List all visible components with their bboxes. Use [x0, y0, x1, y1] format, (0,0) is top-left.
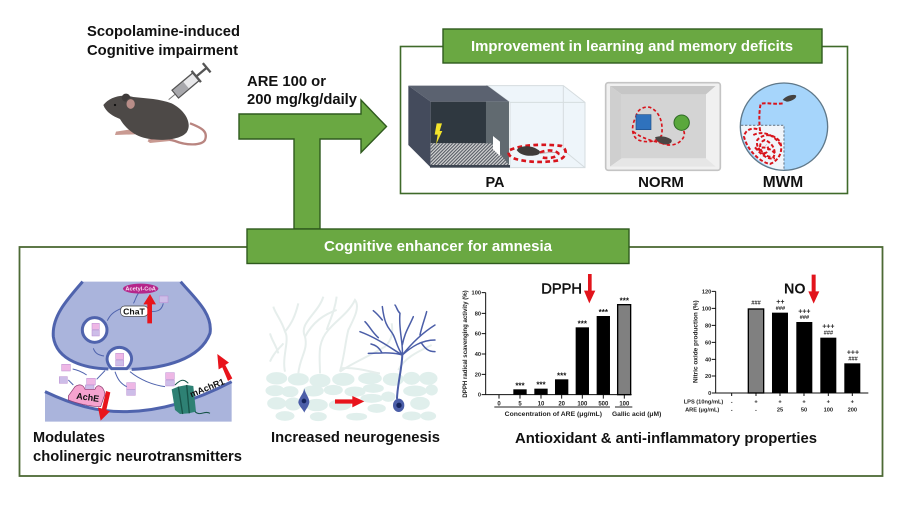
- y ticks: 60: [705, 340, 711, 346]
- y ticks: 100: [702, 306, 711, 312]
- significance: ***: [557, 371, 567, 380]
- significance: ***: [578, 319, 588, 328]
- y ticks: 100: [472, 291, 481, 297]
- label: Acetyl-CoA: [123, 284, 158, 294]
- panel: PA test chamber: [408, 86, 585, 168]
- significance: ###: [776, 306, 786, 312]
- receptor: mAchR1: [172, 376, 226, 414]
- x table: -: [731, 399, 733, 405]
- text: dose: ARE 100 or: [247, 74, 326, 90]
- text: scopolamine label: Cognitive impairment: [87, 43, 238, 59]
- diagram: neurogenesis: [267, 297, 437, 420]
- x table: 50: [801, 407, 807, 413]
- y title: DPPH radical scavenging activity (%): [463, 290, 469, 398]
- chart: NO bar chart: [684, 275, 868, 413]
- arrow: T-shaped green treatment arrow: [239, 100, 386, 229]
- icon: lightning: [435, 123, 442, 145]
- heading: improvement: Improvement in learning and memory deficits: [471, 39, 793, 55]
- x table: 25: [777, 407, 783, 413]
- text: scopolamine label: Scopolamine-induced: [87, 24, 240, 40]
- significance: ***: [515, 381, 526, 390]
- icon: mature neuron: [360, 305, 435, 398]
- receptor: mAchR1: mAchR1: [188, 376, 226, 399]
- text: dose: 200 mg/kg/daily: [247, 92, 358, 108]
- y ticks: [472, 291, 481, 399]
- y ticks: 0: [708, 391, 711, 397]
- y ticks: 20: [475, 372, 481, 378]
- x table: +: [851, 399, 855, 405]
- significance: ###: [800, 315, 810, 321]
- panel: NORM test arena: [606, 83, 720, 170]
- text: MWM label: MWM: [763, 174, 803, 191]
- arrow: receptor up: [217, 354, 232, 381]
- text: cholinergic caption: cholinergic neurotransmitters: [33, 449, 242, 465]
- y title: Nitric oxide production (%): [693, 300, 699, 383]
- panel: cognitive outcomes: [400, 46, 848, 194]
- axes: [712, 291, 868, 396]
- label: Acetyl-CoA: Acetyl-CoA: [125, 287, 156, 293]
- significance: [515, 297, 630, 390]
- chart: DPPH bar chart: [463, 274, 661, 418]
- x table: +: [802, 399, 806, 405]
- chart: NO bar chart: +++: [798, 308, 810, 315]
- exploration path: [633, 107, 684, 145]
- arrow: DPPH down: [584, 274, 595, 303]
- chart: NO bar chart: +++: [847, 350, 859, 357]
- text: antioxidant caption: Antioxidant & anti-inflammatory properties: [515, 431, 817, 447]
- row labels: [684, 399, 723, 413]
- arrow: differentiation: [335, 396, 364, 407]
- chart: NO bar chart: +++: [822, 324, 834, 331]
- text: NORM label: NORM: [638, 174, 684, 191]
- axes: [482, 293, 632, 399]
- background cells: [267, 373, 437, 420]
- row labels: LPS (10ng/mL): [684, 399, 723, 405]
- chart: DPPH bar chart: Gallic acid (μM): [612, 411, 661, 418]
- panel: cognitive enhancer mechanisms: [20, 247, 882, 476]
- icon: syringe: [164, 62, 211, 105]
- heading: cognitive enhancer: Cognitive enhancer for amnesia: [324, 239, 553, 255]
- y ticks: 120: [702, 289, 711, 295]
- significance: ***: [620, 297, 630, 306]
- mouse: [783, 95, 796, 102]
- arrow: ChaT up: [143, 294, 156, 323]
- significance: ***: [536, 381, 547, 390]
- y ticks: [702, 289, 711, 397]
- x table: [731, 399, 857, 413]
- x table: -: [731, 407, 733, 413]
- object: blue cube: [636, 115, 651, 130]
- title: NO: [784, 281, 805, 297]
- arrow: AchE down: [98, 391, 110, 421]
- mouse: [655, 136, 672, 144]
- x table: +: [778, 399, 782, 405]
- object: green ball: [674, 115, 689, 130]
- title: DPPH: [541, 281, 582, 297]
- x table: 200: [848, 407, 857, 413]
- x table: +: [754, 399, 758, 405]
- enzyme: AchE: AchE: [76, 391, 100, 404]
- x ticks: 100: [619, 401, 630, 407]
- icon: vesicle transmitters: [59, 296, 174, 395]
- mouse path: [509, 145, 566, 162]
- y ticks: 60: [475, 332, 481, 338]
- text: neurogenesis caption: Increased neurogenesis: [271, 430, 440, 446]
- bars: [748, 309, 764, 393]
- significance: ###: [848, 356, 859, 362]
- y ticks: 0: [478, 393, 481, 399]
- significance: ###: [824, 330, 834, 336]
- y ticks: 80: [475, 311, 481, 317]
- x ticks: 100: [577, 401, 588, 407]
- label: ChaT: ChaT: [123, 306, 146, 316]
- significance: [751, 300, 859, 362]
- x ticks: 500: [598, 401, 609, 407]
- x ticks: 5: [518, 401, 522, 407]
- x table: +: [827, 399, 831, 405]
- x table: -: [755, 407, 757, 413]
- icon: mouse with syringe: [103, 62, 211, 144]
- icon: young neuron: [298, 388, 309, 413]
- text: PA label: PA: [485, 175, 505, 191]
- light compartment: [487, 86, 585, 168]
- significance: ###: [751, 300, 762, 306]
- enzyme: AchE: [68, 385, 105, 407]
- y ticks: 20: [705, 374, 711, 380]
- significance: ***: [599, 308, 609, 317]
- row labels: ARE (μg/mL): [685, 407, 719, 413]
- y ticks: 80: [705, 323, 711, 329]
- y ticks: 40: [705, 357, 711, 363]
- x ticks: 20: [558, 401, 566, 407]
- arrow: NO down: [808, 275, 819, 304]
- x titles: Concentration of ARE (μg/mL): [505, 411, 602, 418]
- diagram: cholinergic synapse: [45, 282, 232, 422]
- heading: cognitive enhancer: [247, 229, 629, 264]
- arrows: transmitter flow: [68, 293, 165, 387]
- heading: improvement: [443, 29, 822, 63]
- x ticks: 10: [538, 401, 545, 407]
- panel: MWM test pool: [740, 83, 828, 170]
- background dendrites: [270, 297, 432, 373]
- dark compartment: [408, 86, 510, 168]
- x ticks: [497, 401, 630, 407]
- text: cholinergic caption: Modulates: [33, 430, 105, 446]
- y ticks: 40: [475, 352, 481, 358]
- chart: NO bar chart: ++: [776, 299, 784, 306]
- bars: [513, 316, 610, 395]
- swim path: [744, 103, 783, 164]
- x table: 100: [824, 407, 833, 413]
- x ticks: 0: [497, 401, 501, 407]
